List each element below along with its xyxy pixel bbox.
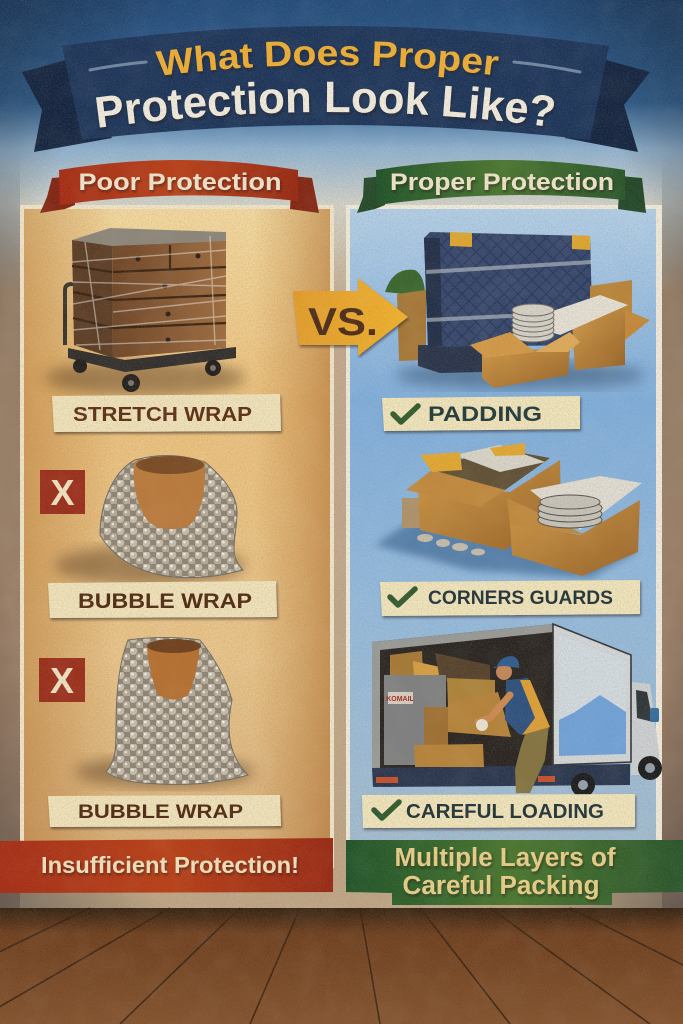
icon: mattress and packed boxes [385,232,650,389]
title text: What Does Proper [155,41,500,80]
icon: open boxes with corner guards [375,443,642,578]
worker [476,656,550,793]
icon: dresser on cart with stretch wrap [45,228,245,396]
label: stretch wrap: STRETCH WRAP [73,403,252,426]
vs arrow: VS. [308,301,378,344]
panel: proper protection [346,205,662,868]
icon: vase in bubble wrap [55,455,245,585]
heading banner: proper protection: Proper Protection [390,169,614,196]
floor [0,908,683,1024]
heading banner: poor protection: Poor Protection [78,169,282,196]
icon: moving truck with worker: KOMAIL [386,696,415,703]
label: corners guards: CORNERS GUARDS [428,588,613,609]
label: bubble wrap: BUBBLE WRAP [78,590,252,613]
label: bubble wrap [48,581,277,618]
label: stretch wrap [52,394,281,432]
label: corners guards [380,580,640,616]
panel: poor protection [20,205,334,868]
icon: check [390,589,415,605]
icon: x mark [39,658,85,702]
footer banner: insufficient protection [0,838,333,893]
label: bubble wrap [48,795,281,827]
footer banner: multiple layers: Multiple Layers of [394,844,616,872]
label: padding [382,396,580,431]
title banner [22,26,650,152]
vs arrow [293,278,408,356]
label: padding: PADDING [428,403,542,426]
title text [96,41,556,130]
label: careful loading: CAREFUL LOADING [406,801,604,823]
icon: x mark: X [50,472,75,513]
footer banner: multiple layers: Careful Packing [402,872,600,900]
icon: check [374,802,399,818]
title text: Protection Look Like? [96,82,556,130]
icon: vase wrapped in bubble wrap [75,638,255,788]
icon: x mark [40,470,85,514]
heading banner: proper protection [357,160,646,213]
icon: x mark: X [50,660,74,701]
footer banner: insufficient protection: Insufficient Protection! [41,852,299,878]
icon: moving truck with worker [372,624,662,797]
icon: check [393,406,418,422]
heading banner: poor protection [40,160,319,213]
label: bubble wrap: BUBBLE WRAP [78,801,243,823]
footer banner: multiple layers [346,840,683,905]
label: careful loading [362,794,635,828]
